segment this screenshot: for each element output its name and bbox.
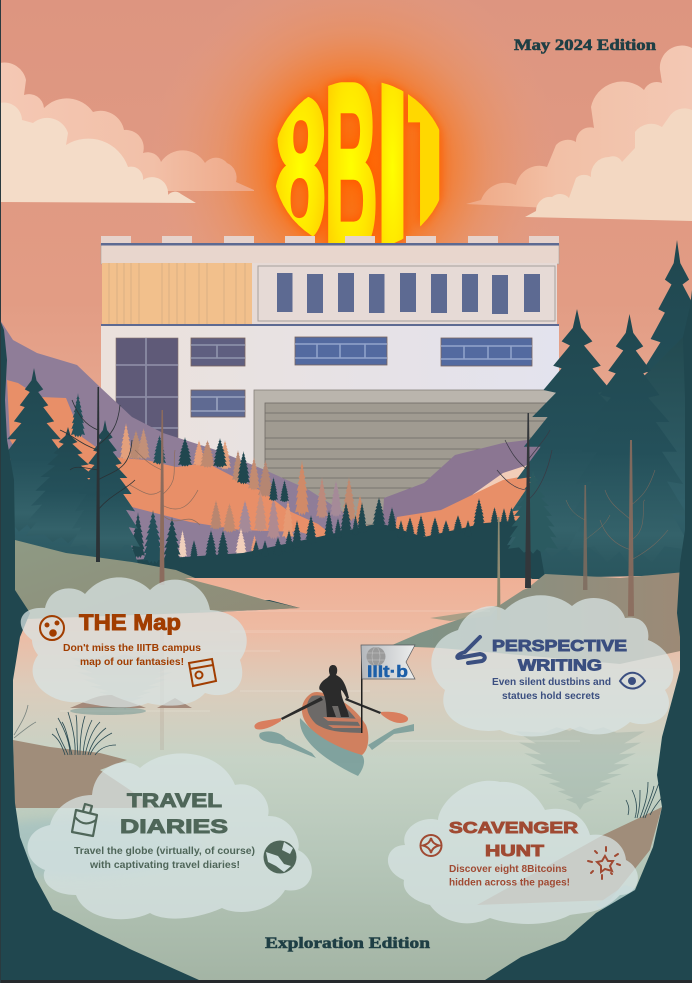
flag: IIIT-B logo: IIIt·b xyxy=(367,662,408,681)
panel: Travel Diaries cloud xyxy=(28,753,312,919)
text: map blurb: Don't miss the IIITB campus xyxy=(63,642,201,654)
heading: Perspective Writing: PERSPECTIVE xyxy=(492,638,627,655)
heading: THE Map: THE Map xyxy=(79,610,181,635)
lower left bank xyxy=(13,740,154,808)
text: map blurb xyxy=(63,642,201,668)
heading: Perspective Writing: WRITING xyxy=(518,658,602,674)
heading: Scavenger Hunt xyxy=(449,820,578,860)
heading: Scavenger Hunt: SCAVENGER xyxy=(449,820,578,837)
bare trees xyxy=(60,387,668,620)
icon: map pin xyxy=(189,659,216,686)
building xyxy=(101,236,559,525)
text: perspective blurb: statues hold secrets xyxy=(502,690,600,702)
text: scavenger blurb xyxy=(449,863,570,888)
reeds right xyxy=(626,780,664,818)
sky background xyxy=(0,0,692,600)
cloud: top left xyxy=(0,63,254,203)
lake xyxy=(0,578,692,983)
icon: smiley xyxy=(40,616,64,640)
title: 8BIT sun: B xyxy=(324,33,378,301)
heading: Perspective Writing xyxy=(492,638,627,674)
kayak with paddler and flag xyxy=(254,645,415,776)
distant pale trees xyxy=(120,423,365,558)
icon: eye xyxy=(620,673,645,688)
title: 8BIT sun: I xyxy=(374,34,411,302)
icon: star burst xyxy=(588,847,620,879)
reeds left xyxy=(14,705,116,755)
flag: IIIT-B logo xyxy=(361,645,415,681)
icon: globe xyxy=(264,840,296,874)
title: 8BIT sun: I xyxy=(374,34,411,302)
text: travel blurb: with captivating travel diaries! xyxy=(89,859,240,871)
right pine trees xyxy=(507,240,692,578)
title: 8BIT sun: T xyxy=(393,11,466,380)
cloud: top right xyxy=(466,46,692,221)
panel: Perspective Writing cloud xyxy=(431,595,673,736)
left bank xyxy=(15,540,300,640)
mountains xyxy=(0,320,570,560)
sun glow xyxy=(100,0,592,400)
title: 8BIT sun: T xyxy=(393,11,466,380)
dark forest ridge xyxy=(130,497,550,579)
title: 8BIT sun xyxy=(272,76,446,243)
heading: Travel Diaries: TRAVEL xyxy=(127,791,222,812)
heading: Scavenger Hunt: HUNT xyxy=(485,843,545,860)
dark cave frame xyxy=(0,290,692,983)
text: perspective blurb xyxy=(492,676,611,702)
heading: Travel Diaries: DIARIES xyxy=(120,817,228,838)
text: travel blurb xyxy=(74,845,255,871)
icon: coin xyxy=(420,835,442,856)
text: map blurb: map of our fantasies! xyxy=(80,656,184,668)
text: scavenger blurb: Discover eight 8Bitcoins xyxy=(449,863,567,875)
text: perspective blurb: Even silent dustbins and xyxy=(492,676,611,688)
text: scavenger blurb: hidden across the pages! xyxy=(449,876,570,888)
lower right bank xyxy=(477,807,662,905)
icon: suitcase xyxy=(72,804,97,836)
right bank xyxy=(390,572,685,664)
text: travel blurb: Travel the globe (virtually, of course) xyxy=(74,845,255,857)
title: 8BIT sun: 8 xyxy=(271,58,329,281)
heading: Travel Diaries xyxy=(120,791,228,838)
water reflections and streaks xyxy=(0,610,645,878)
left pine trees xyxy=(0,368,182,573)
edition date: May 2024 Edition xyxy=(514,37,656,54)
panel: THE Map cloud xyxy=(21,577,247,707)
title: 8BIT sun: 8 xyxy=(271,58,329,281)
footer: edition name: Exploration Edition xyxy=(265,935,430,952)
panel: Scavenger Hunt cloud xyxy=(388,781,638,924)
icon: squiggle pen xyxy=(457,637,485,663)
title: 8BIT sun: B xyxy=(324,33,378,301)
